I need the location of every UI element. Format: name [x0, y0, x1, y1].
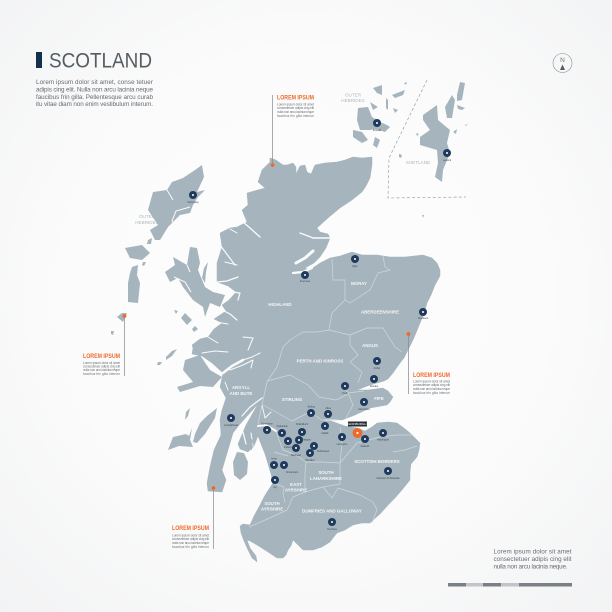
callout: west: nulla non arcu lacinia neque [83, 368, 120, 372]
icon: compass north [553, 54, 572, 72]
map: Shetland [399, 82, 468, 218]
marker: Newtown St Boswells [377, 467, 400, 480]
label: Shetland: SHETLAND [406, 160, 431, 165]
icon: compass north: N [560, 57, 565, 64]
region labels: LANARKSHIRE [310, 476, 342, 481]
marker: Stornoway [187, 191, 199, 204]
marker: Newtown St Boswells: Newtown St Boswells [377, 477, 400, 480]
marker: Irvine [270, 458, 278, 469]
marker: Inverness [300, 271, 311, 283]
title block: SCOTLAND [49, 50, 152, 72]
region labels: STIRLING [282, 397, 303, 402]
intro text: Lorem ipsum dolor sit amet, conse tetuer [36, 79, 153, 86]
marker: Ayr: Ayr [273, 486, 277, 489]
marker: Elgin [351, 255, 359, 268]
marker: Stirling [307, 406, 315, 417]
marker: Glenrothes: Glenrothes [358, 408, 371, 411]
callout: west: Lorem ipsum dolor sit amet [83, 361, 120, 365]
callout: north: nulla non arcu lacinia neque [277, 110, 314, 114]
marker: Haddington [377, 429, 390, 442]
label: Outer Hebrides west: OUTER [139, 214, 156, 219]
callout: south-west: LOREM IPSUM [172, 526, 209, 532]
footer text [494, 548, 572, 570]
marker: Forfar [373, 357, 381, 370]
marker: Clydebank [276, 425, 288, 437]
callout: west: faucibus frin gilla interum [83, 372, 120, 376]
marker: Kirkwall: Kirkwall [373, 129, 382, 132]
callout: north: consectetuer adipis cing elit [277, 106, 314, 110]
marker: Irvine: Irvine [271, 458, 278, 460]
marker: Alloa [324, 407, 332, 418]
region labels: AND BUTE [230, 391, 252, 396]
map: Orkney [353, 82, 407, 148]
callout: west [83, 314, 126, 376]
marker: Glasgow: Glasgow [301, 438, 311, 442]
marker: Livingston: Livingston [337, 443, 348, 446]
map: sea lochs and firths [202, 222, 332, 480]
region labels: ABERDEENSHIRE [361, 310, 399, 314]
marker: Barrhead: Barrhead [291, 454, 302, 457]
marker: Aberdeen [418, 308, 429, 320]
callout: south-west: faucibus frin gilla interum [172, 545, 209, 549]
marker: Motherwell [310, 442, 329, 453]
marker: Dundee [370, 375, 379, 388]
marker: Edinburgh capital [348, 422, 367, 438]
callout: south-west: consectetuer adipis cing elit [172, 537, 209, 541]
marker: Falkirk [321, 422, 329, 435]
region labels [230, 281, 400, 514]
scale bar [448, 583, 572, 586]
callout: west: LOREM IPSUM [83, 354, 120, 360]
marker: Lochgilphead [224, 414, 239, 427]
marker: Dumfries: Dumfries [327, 528, 338, 531]
callout: east: LOREM IPSUM [413, 373, 450, 379]
marker: Forfar: Forfar [374, 367, 380, 370]
label: Outer Hebrides north: OUTER [345, 92, 362, 98]
marker: Dundee: Dundee [370, 385, 379, 388]
marker: Edinburgh capital: EDINBURGH [348, 422, 367, 426]
region labels: SCOTTISH BORDERS [354, 459, 400, 464]
region labels: MORAY [351, 281, 367, 286]
marker: Alloa: Alloa [325, 407, 331, 410]
marker: Stornoway: Stornoway [187, 201, 199, 204]
marker: Paisley [284, 437, 293, 449]
region labels: EAST [290, 482, 302, 487]
region labels: AYRSHIRE [261, 506, 283, 512]
intro text: adipis cing elit. Nulla non arcu lacinia neque [36, 86, 153, 94]
marker: Hamilton: Hamilton [305, 459, 315, 462]
marker: Lochgilphead: Lochgilphead [224, 424, 239, 427]
region labels: DUMFRIES AND GALLOWAY [302, 508, 362, 514]
region labels: SOUTH [264, 501, 280, 506]
marker: Glenrothes [358, 398, 371, 411]
callout: south-west: Lorem ipsum dolor sit amet [172, 534, 209, 538]
callout: south-west [172, 486, 215, 549]
intro text: faucibus frin gilla. Pellentesque arcu curab [36, 94, 153, 101]
marker: Lerwick: Lerwick [443, 159, 452, 162]
callout: north: LOREM IPSUM [277, 96, 314, 102]
callout: east [407, 332, 450, 395]
marker: Elgin: Elgin [352, 265, 358, 268]
marker: Falkirk: Falkirk [321, 432, 329, 435]
callout: east: Lorem ipsum dolor sit amet [413, 380, 450, 384]
label: Outer Hebrides north: HEBRIDES [341, 98, 365, 103]
marker: Ayr [271, 476, 279, 489]
map: regional borders [249, 256, 417, 527]
footer text: nulla non arcu lacinia neque. [494, 564, 568, 570]
marker: Kilmarnock: Kilmarnock [286, 471, 299, 474]
marker: Motherwell: Motherwell [317, 450, 329, 453]
marker: Dumbarton: Dumbarton [261, 422, 274, 426]
region labels: PERTH AND KINROSS [297, 358, 343, 364]
callout: east: nulla non arcu lacinia neque [413, 387, 450, 391]
marker: Aberdeen: Aberdeen [418, 317, 429, 320]
map: Outer Hebrides [111, 165, 205, 335]
region labels: SOUTH [318, 470, 334, 475]
region labels: AYRSHIRE [285, 488, 307, 492]
region labels: ARGYLL [232, 385, 250, 390]
region labels: FIFE [374, 396, 384, 401]
callout: south-west: nulla non arcu lacinia neque [172, 541, 209, 545]
map: Inner Hebrides [157, 247, 253, 480]
marker: Dalkeith: Dalkeith [361, 445, 370, 448]
marker: Dalkeith [361, 435, 370, 448]
callout: east: faucibus frin gilla interum [413, 391, 450, 395]
callout: north: Lorem ipsum dolor sit amet [277, 102, 314, 106]
inset border: Shetland dashed line [388, 80, 466, 198]
marker: Lerwick [443, 149, 452, 162]
marker: Kirkintilloch [296, 423, 309, 436]
marker: Kilmarnock [280, 461, 299, 474]
region labels: HIGHLAND [268, 302, 292, 307]
marker: Glasgow [295, 436, 311, 444]
marker: Clydebank: Clydebank [276, 425, 288, 428]
callout: west: consectetuer adipis cing elit [83, 364, 120, 368]
marker: Perth [341, 382, 349, 395]
marker: Kirkintilloch: Kirkintilloch [296, 423, 309, 426]
marker: Barrhead [291, 444, 302, 457]
callout: north [271, 95, 314, 167]
footer text: consectetuer adipis cing elit [494, 556, 572, 563]
marker: Paisley: Paisley [284, 446, 293, 449]
intro text [36, 79, 153, 108]
intro text: itu vitae diam non enim vestibulum interum. [36, 101, 153, 108]
callout: north: faucibus frin gilla interum [277, 114, 314, 118]
marker: Dumfries [327, 518, 338, 531]
map: mainland Scotland [192, 157, 440, 562]
marker: Haddington: Haddington [377, 438, 390, 442]
label: Outer Hebrides west: HEBRIDES [135, 220, 159, 225]
marker: Livingston [337, 433, 348, 446]
marker: Dumbarton [261, 422, 274, 434]
marker: Kirkwall [373, 119, 382, 132]
marker: Hamilton [305, 449, 315, 462]
callout: east: consectetuer adipis cing elit [413, 383, 450, 387]
marker: Inverness: Inverness [300, 280, 311, 283]
marker: Perth: Perth [342, 392, 349, 395]
region labels: ANGUS [362, 343, 378, 348]
marker: Stirling: Stirling [307, 406, 315, 408]
footer text: Lorem ipsum dolor sit amet [494, 548, 572, 556]
